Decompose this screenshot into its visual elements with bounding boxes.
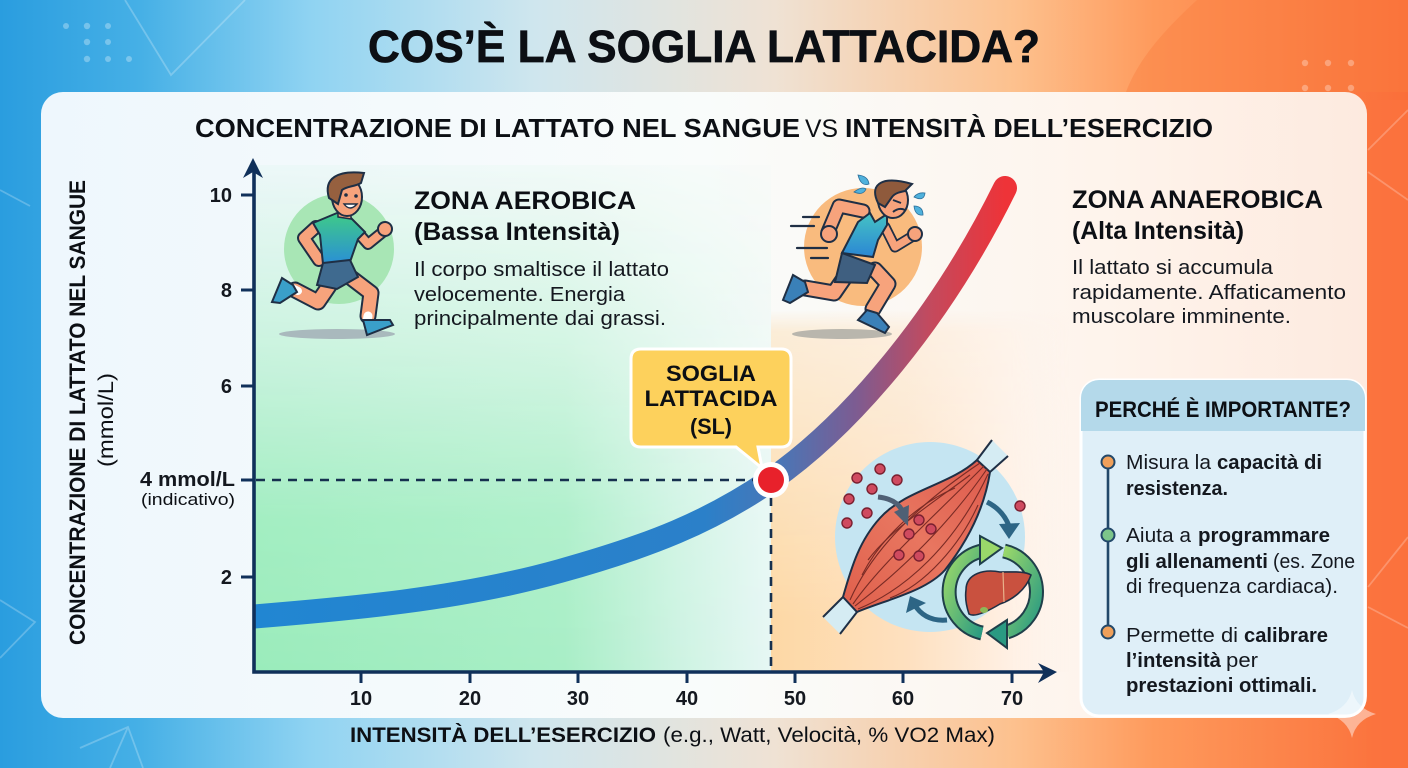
chart subtitle	[195, 113, 1213, 143]
point 3: l’intensità	[1126, 650, 1222, 672]
y axis title: CONCENTRAZIONE DI LATTATO NEL SANGUE	[65, 180, 90, 645]
x axis tick labels: 20	[459, 688, 481, 710]
text: zona anaerobica	[1072, 186, 1346, 328]
panel header: PERCHÉ È IMPORTANTE?	[1095, 397, 1351, 422]
text: zona aerobica	[414, 187, 669, 330]
zone: aerobic background	[255, 165, 771, 672]
panel header	[1081, 380, 1365, 431]
point 3: per	[1226, 650, 1258, 672]
x axis tick labels: 60	[892, 688, 914, 710]
chart subtitle: INTENSITÀ DELL’ESERCIZIO	[845, 113, 1213, 143]
x axis title: INTENSITÀ DELL’ESERCIZIO	[350, 724, 656, 747]
zone: anaerobic background	[771, 315, 1024, 670]
text: zona anaerobica: ZONA ANAEROBICA	[1072, 186, 1323, 214]
x axis title: (e.g., Watt, Velocità, % VO2 Max)	[663, 724, 995, 747]
point 2: Aiuta a	[1126, 525, 1192, 547]
point 2: programmare	[1198, 525, 1330, 547]
y axis tick labels: 2	[221, 567, 232, 589]
x axis tick labels: 40	[676, 688, 698, 710]
chart subtitle: VS	[805, 115, 838, 143]
x axis tick labels: 10	[350, 688, 372, 710]
text: zona aerobica: ZONA AEROBICA	[414, 187, 636, 215]
threshold point	[753, 462, 789, 498]
y axis tick labels: 4 mmol/L	[140, 469, 235, 491]
threshold dashed guides	[256, 480, 771, 672]
x axis title	[350, 724, 995, 747]
icon: sweating runner	[783, 175, 925, 339]
y axis tick labels: 10	[210, 185, 232, 207]
y axis title: (mmol/L)	[95, 373, 118, 467]
icon: muscle and liver lactate cycle	[823, 440, 1036, 648]
x axis tick labels: 30	[567, 688, 589, 710]
text: zona anaerobica: rapidamente. Affaticamento	[1072, 282, 1346, 304]
axes	[241, 158, 1057, 683]
point 2: di frequenza cardiaca).	[1126, 576, 1338, 598]
callout: soglia lattacida: SOGLIA	[666, 361, 756, 386]
panel: perché è importante	[1081, 380, 1365, 716]
text: zona aerobica: (Bassa Intensità)	[414, 218, 620, 246]
point 1: capacità di	[1217, 452, 1322, 474]
point 3: Permette di	[1126, 625, 1238, 647]
lactate curve	[235, 188, 1005, 618]
decorative sparkle	[1328, 690, 1376, 738]
point 3: prestazioni ottimali.	[1126, 675, 1317, 697]
text: zona anaerobica: Il lattato si accumula	[1072, 257, 1274, 279]
y axis tick labels: 6	[221, 376, 232, 398]
point 2	[1126, 525, 1355, 598]
x axis tick labels: 50	[784, 688, 806, 710]
callout: soglia lattacida	[631, 349, 791, 468]
point 1: resistenza.	[1126, 478, 1228, 500]
point 1	[1126, 452, 1322, 500]
point 3: calibrare	[1244, 625, 1328, 647]
text: zona aerobica: velocemente. Energia	[414, 284, 626, 306]
point 3	[1126, 625, 1328, 697]
text: zona anaerobica: muscolare imminente.	[1072, 306, 1291, 328]
text: zona anaerobica: (Alta Intensità)	[1072, 217, 1244, 245]
icon: happy runner	[272, 172, 395, 339]
y axis title	[65, 180, 118, 645]
title: COS’È LA SOGLIA LATTACIDA?	[368, 21, 1040, 72]
text: zona aerobica: Il corpo smaltisce il lattato	[414, 259, 669, 281]
point 2: gli allenamenti	[1126, 551, 1268, 573]
y axis tick labels: 8	[221, 280, 232, 302]
y axis tick labels: (indicativo)	[141, 490, 235, 509]
callout: soglia lattacida: LATTACIDA	[644, 386, 778, 411]
text: zona aerobica: principalmente dai grassi.	[414, 308, 666, 330]
y axis tick labels	[140, 185, 235, 589]
chart subtitle: CONCENTRAZIONE DI LATTATO NEL SANGUE	[195, 113, 800, 143]
x axis tick labels	[350, 688, 1023, 710]
x axis tick labels: 70	[1001, 688, 1023, 710]
callout: soglia lattacida: (SL)	[690, 414, 732, 439]
point 2: (es. Zone	[1273, 551, 1355, 573]
timeline	[1102, 456, 1114, 638]
point 1: Misura la	[1126, 452, 1212, 474]
main panel	[41, 92, 1367, 718]
